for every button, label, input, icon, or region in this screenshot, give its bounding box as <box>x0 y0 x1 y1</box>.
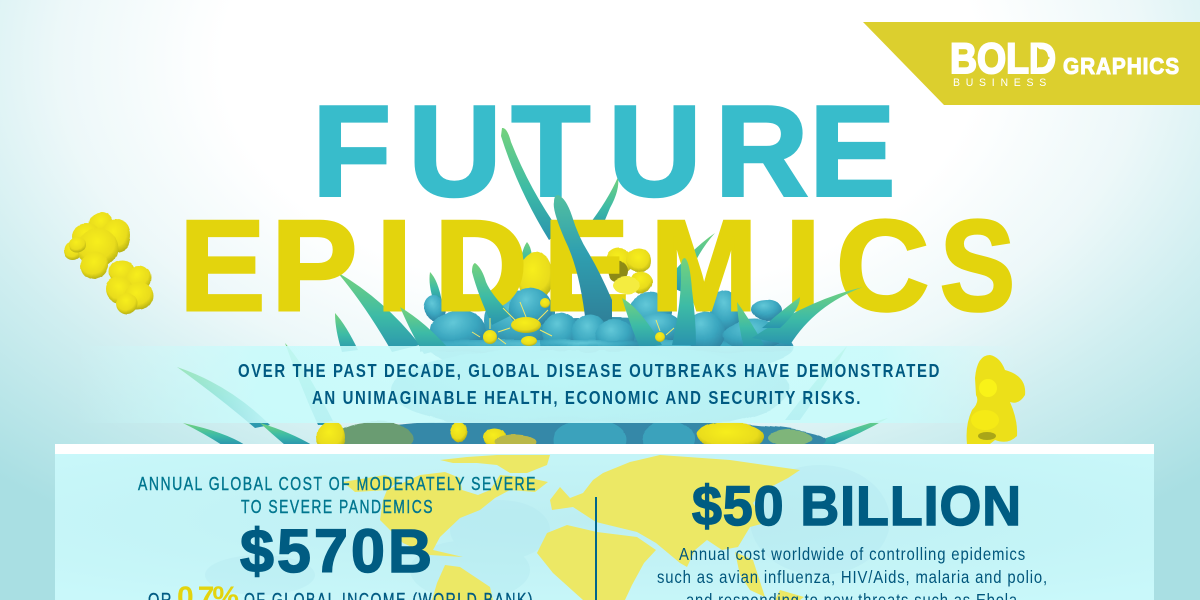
icon: yellow cell cluster left <box>65 212 152 314</box>
icon: yellow cell cluster right <box>967 355 1025 444</box>
right stat <box>657 474 1048 600</box>
logo: Bold Business Graphics <box>863 22 1200 105</box>
right stat: Annual cost worldwide of controlling epidemics <box>679 544 1026 564</box>
faint virus reflection <box>205 465 890 600</box>
spikes in front of title <box>177 195 888 446</box>
hairs on yellow cells <box>472 302 674 344</box>
intro text: AN UNIMAGINABLE HEALTH, ECONOMIC AND SECURITY RISKS. <box>312 387 862 408</box>
yellow cells behind body <box>518 248 653 303</box>
title: FUTURE: FUTURE <box>312 80 895 224</box>
left stat: ANNUAL GLOBAL COST OF MODERATELY SEVERE <box>138 473 537 494</box>
lower body below band <box>317 418 825 462</box>
blue lumps in front of title <box>540 312 787 354</box>
intro text: OVER THE PAST DECADE, GLOBAL DISEASE OUTBREAKS HAVE DEMONSTRATED <box>238 360 941 381</box>
panel: statistics <box>55 444 1154 600</box>
right stat: $50 BILLION <box>692 474 1022 537</box>
title: EPIDEMICS: EPIDEMIC <box>179 194 929 338</box>
spikes behind title <box>337 128 715 352</box>
band behind intro text <box>75 346 1020 423</box>
spikes in front of lumps <box>622 258 863 348</box>
divider <box>595 497 597 600</box>
left stat: $570B <box>240 517 432 585</box>
world map <box>343 455 804 600</box>
logo: Bold Business Graphics: BOLD <box>950 35 1056 83</box>
virus parts behind title <box>337 128 793 435</box>
virus illustration in front of title <box>177 195 888 462</box>
blue body <box>390 288 793 435</box>
title: EPIDEMICS: S <box>940 194 1015 338</box>
logo: Bold Business Graphics: BUSINESS <box>953 77 1052 89</box>
left stat: TO SEVERE PANDEMICS <box>241 496 434 517</box>
right stat: such as avian influenza, HIV/Aids, malaria and polio, <box>657 567 1048 587</box>
left stat <box>138 473 537 600</box>
intro text <box>238 360 941 408</box>
yellow cells on body <box>483 298 665 346</box>
logo: Bold Business Graphics: GRAPHICS <box>1063 53 1180 79</box>
